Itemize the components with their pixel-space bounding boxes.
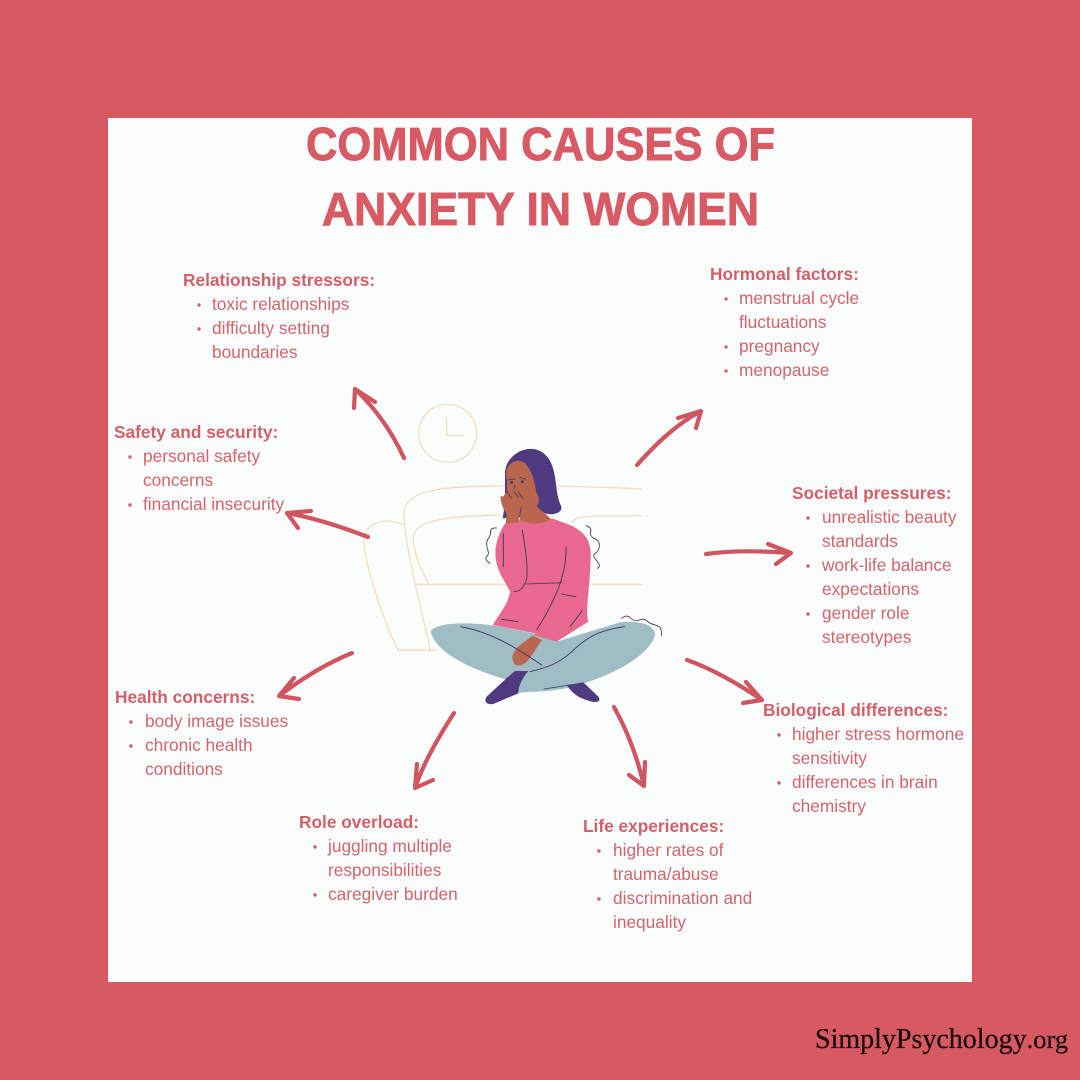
text block: biological differences: differences in brain xyxy=(792,772,938,792)
text block: hormonal factors: menopause xyxy=(739,360,829,380)
arrow: to societal pressures xyxy=(706,544,791,564)
text block: relationship stressors: difficulty setting xyxy=(212,318,330,338)
text block: health concerns: body image issues xyxy=(145,711,288,731)
arrow: to health concerns xyxy=(279,653,352,699)
panel: white card xyxy=(108,118,972,982)
clothing and face lines xyxy=(461,477,624,689)
text block: biological differences xyxy=(763,700,964,816)
hair xyxy=(503,449,561,518)
text block: societal pressures: unrealistic beauty xyxy=(822,507,957,527)
text block: life experiences: higher rates of xyxy=(613,840,724,860)
arrow: to role overload xyxy=(415,713,454,788)
source watermark: SimplyPsychology.org xyxy=(815,1024,1068,1055)
text block: safety and security xyxy=(114,422,285,514)
shaking lines xyxy=(486,526,662,636)
text block: societal pressures xyxy=(792,483,957,647)
text block: safety and security: Safety and security: xyxy=(114,422,278,442)
text block: role overload: caregiver burden xyxy=(328,884,458,904)
text block: biological differences: sensitivity xyxy=(792,748,867,768)
text block: societal pressures: expectations xyxy=(822,579,919,599)
text block: hormonal factors: pregnancy xyxy=(739,336,820,356)
text block: role overload: juggling multiple xyxy=(327,836,452,856)
text block: life experiences: discrimination and xyxy=(613,888,752,908)
text block: role overload: Role overload: xyxy=(299,812,419,832)
text block: societal pressures: Societal pressures: xyxy=(792,483,951,503)
sweater xyxy=(493,518,591,642)
sofa outline xyxy=(364,486,642,652)
text block: societal pressures: work-life balance xyxy=(821,555,952,575)
text block: biological differences: higher stress hormone xyxy=(792,724,964,744)
text block: relationship stressors xyxy=(183,270,375,362)
text block: safety and security: financial insecurity xyxy=(143,494,285,514)
hands xyxy=(512,636,542,666)
text block: life experiences: trauma/abuse xyxy=(613,864,719,884)
text block: hormonal factors: menstrual cycle xyxy=(739,288,859,308)
title: COMMON CAUSES OF xyxy=(306,118,775,170)
arrow: to safety and security xyxy=(287,511,368,537)
text block: safety and security: personal safety xyxy=(143,446,261,466)
text block: biological differences: Biological differences: xyxy=(763,700,948,720)
socks xyxy=(485,671,528,704)
text block: life experiences: Life experiences: xyxy=(583,816,724,836)
illustration: anxious woman on sofa xyxy=(364,404,662,704)
face and neck xyxy=(506,461,552,525)
arrow: to hormonal factors xyxy=(637,411,701,465)
arrow: to life experiences xyxy=(614,707,645,786)
text block: societal pressures: standards xyxy=(822,531,898,551)
text block: health concerns xyxy=(115,687,288,779)
text block: hormonal factors xyxy=(710,264,859,380)
sleeve cuff xyxy=(533,620,570,642)
text block: biological differences: chemistry xyxy=(792,796,866,816)
text block: health concerns: conditions xyxy=(145,759,223,779)
arrow: to biological differences xyxy=(687,660,762,703)
trousers xyxy=(431,622,655,693)
text block: societal pressures: gender role xyxy=(822,603,909,623)
text block: societal pressures: stereotypes xyxy=(822,627,912,647)
arrow: to relationship stressors xyxy=(354,389,404,458)
text block: health concerns: Health concerns: xyxy=(115,687,255,707)
icon: wall clock xyxy=(419,404,477,462)
text block: relationship stressors: toxic relationships xyxy=(212,294,350,314)
woman figure xyxy=(431,449,655,704)
text block: relationship stressors: boundaries xyxy=(212,342,298,362)
text block: safety and security: concerns xyxy=(143,470,213,490)
title xyxy=(306,118,775,235)
text block: life experiences xyxy=(583,816,752,932)
text block: role overload xyxy=(299,812,458,904)
text block: hormonal factors: Hormonal factors: xyxy=(710,264,859,284)
text block: relationship stressors: Relationship stressors: xyxy=(183,270,375,290)
text block: health concerns: chronic health xyxy=(145,735,253,755)
text block: life experiences: inequality xyxy=(613,912,686,932)
text block: hormonal factors: fluctuations xyxy=(739,312,827,332)
text block: role overload: responsibilities xyxy=(328,860,442,880)
title: ANXIETY IN WOMEN xyxy=(322,183,759,235)
